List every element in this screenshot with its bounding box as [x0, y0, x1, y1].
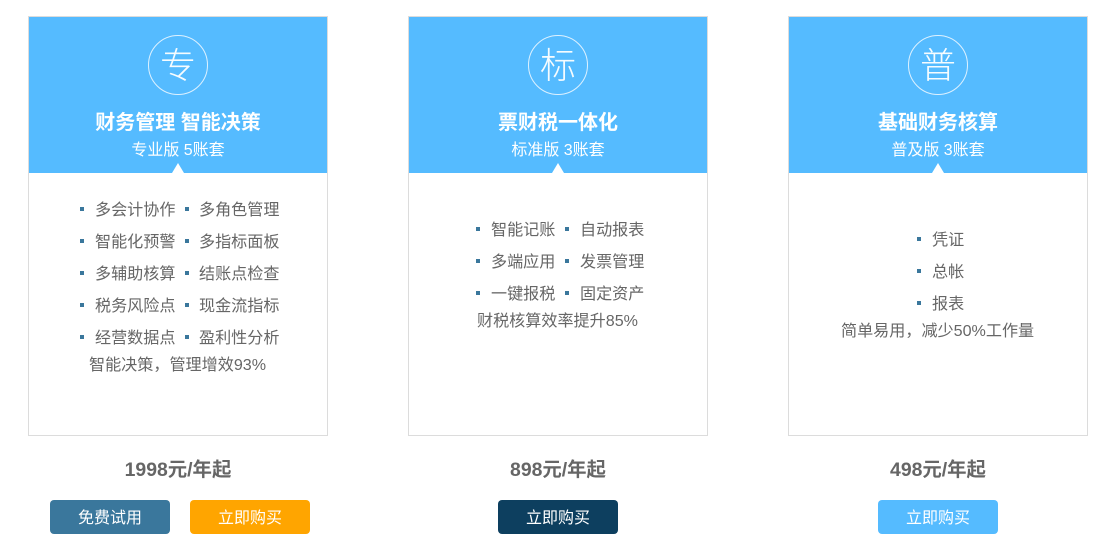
- feature list: standard: 自动报表: [580, 221, 644, 239]
- feature list: standard: 多端应用: [491, 253, 555, 271]
- icon: pointer triangle: [552, 163, 564, 173]
- panel: basic plan: [788, 16, 1088, 534]
- price: standard: 898元/年起: [510, 459, 606, 481]
- button: free trial: [50, 500, 170, 534]
- feature list: professional: 盈利性分析: [199, 329, 279, 347]
- feature list: professional: 多角色管理: [199, 201, 279, 219]
- feature list: basic: 总帐: [932, 263, 964, 281]
- feature list: professional: 多指标面板: [199, 233, 279, 251]
- icon: circle 普: 普: [920, 45, 956, 86]
- button: buy basic: 立即购买: [906, 510, 970, 527]
- card: professional: [28, 16, 328, 436]
- icon: circle 专: [148, 35, 208, 95]
- header: professional: [29, 17, 327, 173]
- feature list: standard: 发票管理: [580, 253, 644, 271]
- feature list: standard: 财税核算效率提升85%: [477, 312, 638, 330]
- feature list: professional: 现金流指标: [199, 297, 279, 315]
- subheading: basic: 普及版 3账套: [891, 142, 985, 159]
- feature list: basic: 凭证: [932, 231, 964, 249]
- feature list: professional: 智能决策，管理增效93%: [89, 356, 266, 374]
- heading: standard: 票财税一体化: [498, 112, 618, 134]
- feature list: professional: 智能化预警: [95, 233, 175, 251]
- icon: circle 普: [908, 35, 968, 95]
- button: buy basic: [878, 500, 998, 534]
- heading: professional: 财务管理 智能决策: [95, 112, 261, 134]
- feature list: professional: [80, 201, 279, 374]
- feature list: professional: 多会计协作: [95, 201, 175, 219]
- feature list: professional: 税务风险点: [95, 297, 175, 315]
- feature list: basic: 报表: [932, 295, 964, 313]
- icon: circle 标: 标: [540, 45, 576, 86]
- panel: standard plan: [408, 16, 708, 534]
- feature list: basic: 简单易用，减少50%工作量: [841, 322, 1034, 340]
- header: basic: [789, 17, 1087, 173]
- icon: pointer triangle: [932, 163, 944, 173]
- card: basic: [788, 16, 1088, 436]
- subheading: standard: 标准版 3账套: [511, 142, 605, 159]
- button: buy standard: 立即购买: [526, 510, 590, 527]
- button: buy professional: 立即购买: [218, 510, 282, 527]
- price: basic: 498元/年起: [890, 459, 986, 481]
- card: standard: [408, 16, 708, 436]
- icon: circle 专: 专: [160, 45, 196, 86]
- subheading: professional: 专业版 5账套: [131, 142, 225, 159]
- button: buy standard: [498, 500, 618, 534]
- button: free trial: 免费试用: [78, 510, 142, 527]
- icon: circle 标: [528, 35, 588, 95]
- feature list: standard: 固定资产: [580, 285, 644, 303]
- button: buy professional: [190, 500, 310, 534]
- feature list: professional: 结账点检查: [199, 265, 279, 283]
- feature list: standard: [476, 221, 644, 330]
- price: professional: 1998元/年起: [125, 459, 231, 481]
- heading: basic: 基础财务核算: [878, 112, 998, 134]
- feature list: professional: 经营数据点: [95, 329, 175, 347]
- feature list: standard: 一键报税: [491, 285, 555, 303]
- feature list: professional: 多辅助核算: [95, 265, 175, 283]
- feature list: standard: 智能记账: [491, 221, 555, 239]
- panel: professional plan: [28, 16, 328, 534]
- feature list: basic: [841, 231, 1034, 340]
- header: standard: [409, 17, 707, 173]
- icon: pointer triangle: [172, 163, 184, 173]
